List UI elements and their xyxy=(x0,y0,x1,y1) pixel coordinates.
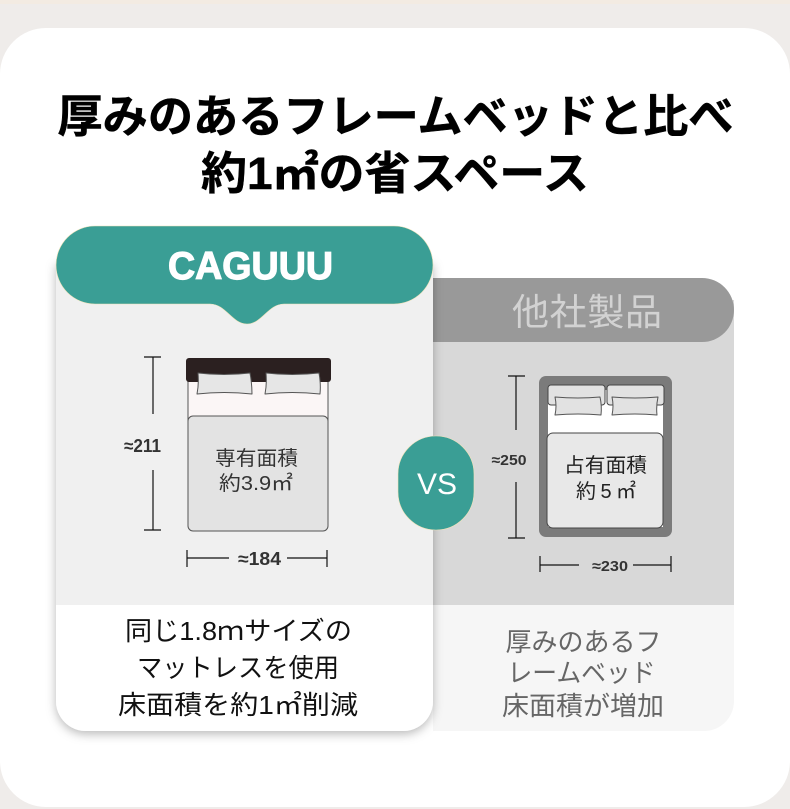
title: 厚みのあるフレームベッドと比べ xyxy=(58,91,734,142)
other bed diagram xyxy=(492,376,672,575)
other products header xyxy=(433,278,734,342)
other products caption: 床面積が増加 xyxy=(502,691,664,721)
pillows xyxy=(197,373,320,394)
height dimension xyxy=(144,357,161,530)
VS badge: VS xyxy=(417,468,457,501)
panel: CAGUUU xyxy=(56,226,433,731)
CAGUUU logo: CAGUUU xyxy=(168,245,333,288)
height label: ≈211 xyxy=(124,436,161,456)
title xyxy=(58,91,734,199)
area label: 専有面積 xyxy=(215,447,298,470)
outer frame xyxy=(539,376,672,537)
other products caption: 厚みのあるフ xyxy=(506,627,662,657)
CAGUUU caption: マットレスを使用 xyxy=(137,653,339,683)
title: 約1㎡の省スペース xyxy=(201,148,589,199)
CAGUUU caption: 同じ1.8ｍサイズの xyxy=(125,616,352,646)
width label: ≈230 xyxy=(592,558,628,575)
CAGUUU bed diagram xyxy=(124,357,331,569)
duvet xyxy=(547,433,663,528)
width dimension xyxy=(187,550,327,567)
headboard xyxy=(186,358,331,382)
bed frame xyxy=(188,375,328,435)
CAGUUU caption xyxy=(118,616,358,720)
height label: ≈250 xyxy=(492,452,526,469)
VS badge xyxy=(398,436,474,530)
area label: 約5㎡ xyxy=(576,479,636,503)
CAGUUU banner xyxy=(56,226,433,324)
area label xyxy=(564,454,647,503)
pillows xyxy=(555,397,658,415)
other products caption xyxy=(502,627,664,721)
width dimension xyxy=(540,556,671,572)
other products caption: レームベッド xyxy=(508,658,656,688)
area label xyxy=(215,447,298,495)
mattress xyxy=(548,390,663,527)
headboards xyxy=(548,385,664,405)
area label: 占有面積 xyxy=(564,454,647,477)
height dimension xyxy=(508,376,525,538)
other products caption panel xyxy=(433,605,734,731)
CAGUUU diagram background xyxy=(56,262,433,605)
panel: other products xyxy=(433,278,734,731)
CAGUUU caption: 床面積を約1㎡削減 xyxy=(118,690,358,720)
CAGUUU card xyxy=(56,262,433,731)
other products body xyxy=(433,300,734,605)
duvet xyxy=(188,416,328,531)
area label: 約3.9㎡ xyxy=(219,471,293,495)
other products heading: 他社製品 xyxy=(512,292,662,333)
width label: ≈184 xyxy=(238,549,281,569)
